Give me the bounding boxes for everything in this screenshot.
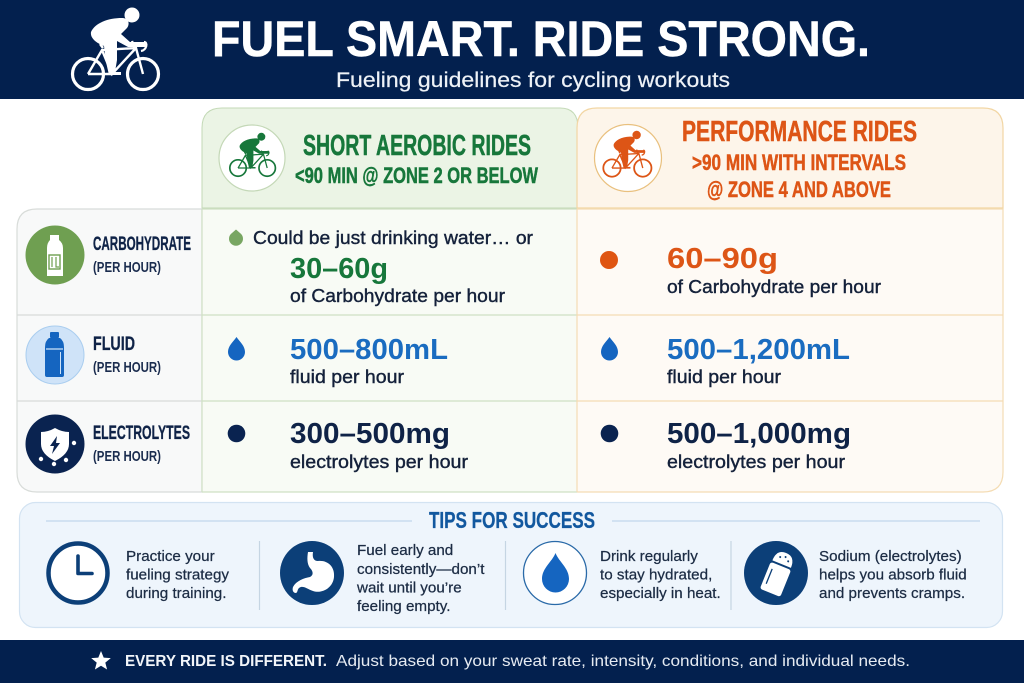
caption: electrolytes per hour xyxy=(667,451,845,472)
subheading: zone: @ ZONE 4 AND ABOVE xyxy=(707,177,891,202)
text: fuel early: Fuel early and xyxy=(357,542,453,559)
icon: green cyclist xyxy=(219,125,285,191)
caption: electrolytes per hour xyxy=(290,451,468,472)
text: drink: especially in heat. xyxy=(600,585,721,602)
subheading: duration and zone: <90 MIN @ ZONE 2 OR BELOW xyxy=(295,163,538,188)
footer text: Adjust based on your sweat rate, intensity, conditions, and individual needs. xyxy=(336,653,910,670)
row: carbohydrate xyxy=(26,226,881,306)
label: carbohydrate: CARBOHYDRATE xyxy=(93,234,191,255)
note: water: Could be just drinking water… or xyxy=(253,227,533,248)
bullet: orange dot xyxy=(600,251,618,269)
text: practice: Practice your xyxy=(126,548,215,565)
value: 500–800mL: 500–800mL xyxy=(290,334,448,366)
heading: performance rides: PERFORMANCE RIDES xyxy=(682,116,917,148)
heading: short aerobic rides: SHORT AEROBIC RIDES xyxy=(303,130,531,162)
tip: fuel early xyxy=(280,541,485,615)
text: sodium: Sodium (electrolytes) xyxy=(819,548,962,565)
bullet: navy dot xyxy=(601,425,618,442)
text: sodium: and prevents cramps. xyxy=(819,585,965,602)
label: per hour: (PER HOUR) xyxy=(93,448,161,465)
icon: stomach xyxy=(280,541,344,605)
icon: star xyxy=(91,651,111,670)
text: drink: Drink regularly xyxy=(600,548,698,565)
footer emphasis: EVERY RIDE IS DIFFERENT. xyxy=(125,653,327,670)
icon: fluid bottle xyxy=(26,326,84,384)
icon: electrolyte shield xyxy=(26,414,84,474)
bullet: green drop xyxy=(229,230,243,246)
value: 30–60g: 30–60g xyxy=(290,253,388,285)
text: practice: fueling strategy xyxy=(126,566,229,584)
icon: water drop xyxy=(524,542,586,604)
text: fuel early: consistently—don’t xyxy=(357,561,485,578)
text: fuel early: wait until you’re xyxy=(356,580,462,596)
tip: practice xyxy=(48,544,229,602)
text: practice: during training. xyxy=(126,585,226,602)
bullet: blue drop xyxy=(228,337,245,360)
panel: performance rides header xyxy=(577,108,1003,208)
row: electrolytes xyxy=(26,414,851,474)
icon: clock xyxy=(48,544,108,602)
value: 500–1,200mL: 500–1,200mL xyxy=(667,334,850,366)
icon: orange cyclist xyxy=(594,124,662,192)
label: electrolytes: ELECTROLYTES xyxy=(93,423,190,444)
subtitle: Fueling guidelines for cycling workouts xyxy=(336,69,730,92)
tip: sodium xyxy=(744,541,967,605)
caption: of Carbohydrate per hour xyxy=(290,285,505,306)
title: FUEL SMART. RIDE STRONG. xyxy=(212,11,870,67)
panel: comparison table xyxy=(17,209,1003,492)
bullet: navy dot xyxy=(228,425,245,442)
icon: salt shaker xyxy=(744,541,808,605)
icon: carbohydrate bottle xyxy=(26,226,84,284)
text: drink: to stay hydrated, xyxy=(600,566,712,584)
header banner xyxy=(0,0,1024,99)
value: 500–1,000mg: 500–1,000mg xyxy=(667,418,851,450)
value: 300–500mg: 300–500mg xyxy=(290,418,450,450)
footer banner xyxy=(0,640,1024,683)
heading: tips for success: TIPS FOR SUCCESS xyxy=(429,507,595,533)
panel: short aerobic rides header xyxy=(202,108,578,208)
label: per hour: (PER HOUR) xyxy=(93,359,161,376)
text: sodium: helps you absorb fluid xyxy=(819,566,967,584)
value: 60–90g: 60–90g xyxy=(667,243,778,275)
bullet: blue drop xyxy=(601,337,618,360)
row: fluid xyxy=(26,326,850,387)
tip: drink xyxy=(524,542,721,604)
icon: cyclist xyxy=(72,8,158,90)
text: fuel early: feeling empty. xyxy=(357,598,450,615)
label: per hour: (PER HOUR) xyxy=(93,259,161,276)
caption: of Carbohydrate per hour xyxy=(667,276,881,297)
caption: fluid per hour xyxy=(290,366,404,387)
caption: fluid per hour xyxy=(667,366,781,387)
panel: tips for success xyxy=(20,502,1002,628)
label: fluid: FLUID xyxy=(93,334,135,355)
subheading: duration: >90 MIN WITH INTERVALS xyxy=(692,150,906,175)
